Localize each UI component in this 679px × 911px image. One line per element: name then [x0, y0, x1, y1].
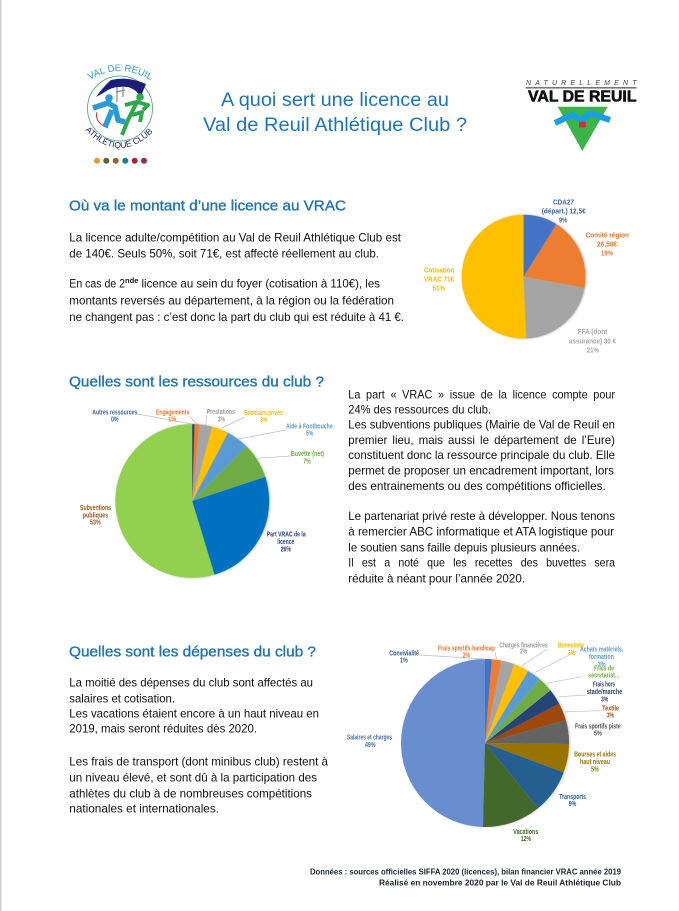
- text block: dépenses: athlètes du club à de nombreuses compétitions: [69, 786, 312, 800]
- label: Bonneterie: Bonneterie: [558, 643, 584, 650]
- label: Convivialité: Convivialité: [389, 651, 419, 658]
- label: Frais de secrétariat: [588, 666, 619, 680]
- label: Buvette: Buvette (net): [291, 451, 324, 458]
- logo: Naturellement Val de Reuil: NATURELLEMENT: [526, 80, 637, 87]
- label: Frais sportifs handicap: Frais sportifs handicap: [438, 646, 495, 653]
- label: Autres ressources: Autres ressources: [92, 409, 137, 416]
- pie slices: dépenses: [443, 701, 527, 785]
- label: Engagements: 1%: [168, 417, 177, 424]
- text block: ressources: réduite à néant pour l’année 2020.: [348, 571, 525, 585]
- label: Buvette: [291, 451, 324, 465]
- logo: Val de Reuil Athlétique Club: [85, 64, 153, 164]
- label: Aide à Fontbouche: 5%: [306, 431, 314, 438]
- label: CDA27: (départ.) 12,5€: [542, 208, 586, 215]
- label: Frais sportifs handicap: 2%: [463, 653, 471, 660]
- text block: ressources: Le partenariat privé reste à développer. Nous tenons: [348, 509, 615, 523]
- label: Engagements: [156, 409, 189, 424]
- text block: montant: ne changent pas : c’est donc la part du club qui est réduite à 41 €.: [69, 310, 404, 324]
- text block: montant: [69, 231, 404, 324]
- label: Frais hors stade/marche: Frais hors: [593, 682, 615, 689]
- label: Frais sportifs piste: Frais sportifs piste: [575, 723, 621, 730]
- label: CDA27: CDA27: [553, 199, 574, 206]
- label: CDA27: 9%: [559, 217, 568, 224]
- heading: ressources: Quelles sont les ressources du club ?: [69, 374, 324, 390]
- label: Comité région: [586, 233, 629, 258]
- text block: dépenses: La moitié des dépenses du club sont affectés au: [69, 676, 313, 690]
- heading: dépenses: Quelles sont les dépenses du club ?: [69, 645, 316, 661]
- label: Prestations: [207, 409, 235, 424]
- label: Transports: [559, 794, 586, 808]
- label: Part VRAC de la licence: 26%: [281, 546, 292, 553]
- label: FFA: assurance) 30 €: [569, 338, 616, 345]
- logo: Naturellement Val de Reuil: VAL DE REUIL: [528, 89, 636, 106]
- label: Charges financières: Charges financières: [499, 642, 548, 649]
- label: Bourses et aides haut niveau: 5%: [591, 766, 599, 773]
- text block: ressources: le soutien sans faille depuis plusieurs années.: [348, 541, 580, 555]
- footer: sources: [310, 866, 621, 888]
- text block: ressources: premier lieu, mais aussi le département de l’Eure): [348, 433, 615, 447]
- label: Frais hors stade/marche: [587, 682, 622, 704]
- label: Vacations: [513, 829, 538, 843]
- label: Prestations: Prestations: [207, 409, 235, 416]
- label: Charges financières: [499, 642, 548, 656]
- label: Salaires et charges: 49%: [365, 742, 376, 749]
- label: Achats matériels, formation: formation: [589, 654, 614, 661]
- label: Vacations: Vacations: [513, 829, 538, 836]
- label: Salaires et charges: Salaires et charges: [347, 734, 392, 742]
- heading: montant: Où va le montant d’une licence au VRAC: [69, 199, 346, 215]
- label: Cotisation VRAC: Cotisation: [424, 267, 454, 274]
- label: Buvette: 7%: [303, 458, 311, 465]
- text block: dépenses: salaires et cotisation.: [69, 691, 175, 705]
- label: Frais de secrétariat: Frais de: [594, 666, 614, 673]
- pie chart: répartition de la licence: [424, 199, 629, 354]
- text block: ressources: Il est a noté que les recettes des buvettes sera: [348, 556, 615, 570]
- label: Frais hors stade/marche: stade/marche: [587, 689, 622, 696]
- label: Comité région: 19%: [601, 251, 614, 258]
- label: Achats matériels, formation: [580, 647, 623, 668]
- label: Subventions publiques: 53%: [90, 520, 101, 527]
- label: Frais sportifs piste: 5%: [594, 731, 602, 738]
- label: Cotisation VRAC: VRAC 71€: [424, 277, 454, 284]
- label: Bourses et aides haut niveau: [574, 752, 616, 773]
- label: CDA27: [542, 199, 586, 224]
- label: Subventions publiques: [80, 505, 111, 527]
- label: Comité région: Comité région: [586, 233, 629, 240]
- label: Achats matériels, formation: 3%: [598, 661, 606, 668]
- pie slices: licence: [492, 246, 554, 308]
- label: Autres ressources: [92, 409, 137, 424]
- label: Bonneterie: [558, 643, 584, 657]
- label: Bonneterie: 3%: [568, 650, 576, 657]
- text block: dépenses: un niveau élevé, et sont dû à la participation des: [69, 771, 317, 785]
- label: Part VRAC de la licence: Part VRAC de la: [267, 532, 306, 539]
- label: Transports: Transports: [559, 794, 586, 801]
- label: Vacations: 12%: [521, 836, 532, 843]
- label: Cotisation VRAC: 51%: [433, 286, 446, 293]
- footer: sources: Données : sources officielles SIFFA 2020 (licences), bilan financier VRAC année 2019: [310, 866, 621, 876]
- label: Achats matériels, formation: Achats matériels,: [580, 647, 623, 654]
- label: Frais sportifs handicap: [438, 646, 495, 660]
- label: Subventions publiques: publiques: [83, 512, 108, 519]
- label: Salaires et charges: [347, 734, 392, 749]
- text block: montant: montants reversés au département, à la région ou la fédération: [69, 293, 394, 307]
- text block: montant: de 140€. Seuls 50%, soit 71€, est affecté réellement au club.: [69, 247, 379, 261]
- label: Prestations: 3%: [218, 416, 226, 424]
- footer: sources: Réalisé en novembre 2020 par le Val de Reuil Athlétique Club: [379, 878, 621, 888]
- label: Textile: [602, 705, 619, 719]
- label: Sponsors privés: [244, 410, 283, 424]
- label: Transports: 9%: [569, 801, 577, 808]
- label: Autres ressources: 0%: [111, 417, 119, 424]
- logo: Naturellement Val de Reuil: [526, 80, 637, 151]
- text block: ressources: permet de proposer un encadrement important, lors: [348, 463, 614, 477]
- label: Engagements: Engagements: [156, 409, 189, 416]
- panel: ressources du club: [69, 374, 615, 585]
- label: Subventions publiques: Subventions: [80, 505, 111, 512]
- label: FFA: 21%: [587, 347, 600, 354]
- logo: Val de Reuil Athlétique Club: VAL DE REUIL: [86, 64, 151, 80]
- text block: ressources: à remercier ABC informatique et ATA logistique pour: [348, 525, 614, 539]
- text block: dépenses: nationales et internationales.: [69, 802, 219, 816]
- label: Aide à Fontbouche: [286, 423, 333, 438]
- label: Part VRAC de la licence: [267, 532, 306, 553]
- label: Frais sportifs piste: [575, 723, 621, 738]
- text block: dépenses: Les frais de transport (dont minibus club) restent à: [69, 755, 328, 769]
- text block: dépenses: 2019, mais seront réduites dès 2020.: [69, 721, 257, 735]
- label: Bourses et aides haut niveau: Bourses et aides: [574, 752, 616, 759]
- text block: ressources: 24% des ressources du club.: [348, 402, 491, 416]
- text block: ressources: des entrainements ou des compétitions officielles.: [348, 479, 606, 493]
- text block: ressources: La part « VRAC » issue de la licence compte pour: [348, 387, 615, 401]
- title: A quoi sert une licence au: [221, 90, 449, 111]
- label: Aide à Fontbouche: Aide à Fontbouche: [286, 423, 333, 430]
- text block: montant: nde: [125, 276, 138, 285]
- text block: montant: La licence adulte/compétition au Val de Reuil Athlétique Club est: [69, 231, 402, 245]
- label: Frais hors stade/marche: 3%: [601, 697, 609, 704]
- logo: Val de Reuil Athlétique Club: ATHLÉTIQUE CLUB: [85, 128, 152, 150]
- label: Charges financières: 2%: [520, 649, 528, 656]
- label: Frais de secrétariat: secretariat...: [588, 673, 619, 680]
- text block: ressources: [348, 387, 615, 585]
- label: Sponsors privés: 3%: [260, 417, 268, 424]
- pie chart: ressources: [80, 409, 333, 553]
- label: Convivialité: [389, 651, 419, 664]
- text block: ressources: Les subventions publiques (Mairie de Val de Reuil en: [348, 417, 615, 431]
- title: Val de Reuil Athlétique Club ?: [203, 115, 467, 136]
- text block: dépenses: Les vacations étaient encore à un haut niveau en: [69, 706, 319, 720]
- text block: montant: licence au sein du foyer (cotisation à 110€), les: [142, 277, 380, 291]
- pie slices: ressources: [154, 462, 231, 540]
- label: Textile: Textile: [602, 705, 619, 712]
- label: FFA: FFA (dont: [578, 329, 608, 336]
- title: [203, 90, 467, 136]
- panel: dépenses du club: [69, 642, 623, 843]
- label: Sponsors privés: Sponsors privés: [244, 410, 283, 417]
- label: Part VRAC de la licence: licence: [277, 539, 294, 546]
- label: Convivialité: 1%: [400, 657, 408, 664]
- text block: ressources: constituent donc la ressource principale du club. Elle: [348, 448, 615, 462]
- text block: dépenses: [69, 676, 328, 816]
- panel: montant d'une licence: [69, 199, 629, 354]
- label: Cotisation VRAC: [424, 267, 454, 293]
- label: Comité région: 26,50€: [597, 242, 617, 249]
- label: FFA: [569, 329, 616, 354]
- label: Bourses et aides haut niveau: haut niveau: [580, 759, 610, 766]
- text block: montant: En cas de 2: [69, 277, 125, 291]
- label: Textile: 3%: [607, 712, 615, 719]
- pie chart: dépenses: [347, 642, 623, 843]
